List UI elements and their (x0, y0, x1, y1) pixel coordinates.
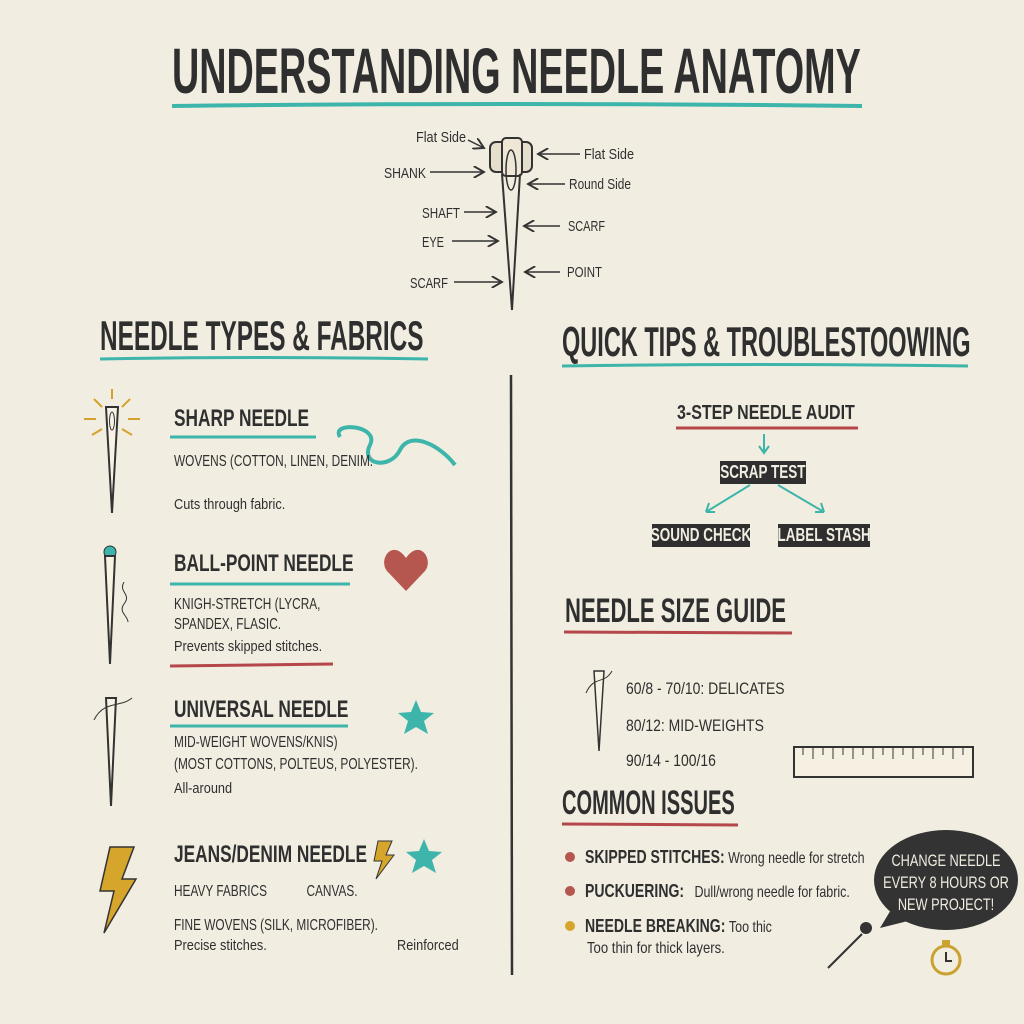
diagram: needle anatomy: POINT (567, 264, 602, 281)
icon: small needle (586, 670, 612, 751)
panel: universal needle (94, 696, 434, 806)
size guide list (586, 670, 974, 778)
panel: ball-point needle: SPANDEX, FLASIC. (174, 616, 281, 633)
diagram: needle anatomy: Flat Side (416, 129, 466, 146)
title: UNDERSTANDING NEEDLE ANATOMY (172, 35, 861, 107)
panel: jeans needle: JEANS/DENIM NEEDLE (174, 841, 367, 868)
diagram: needle anatomy: SCARF (568, 218, 605, 235)
diagram: needle anatomy (384, 129, 634, 310)
panel: jeans needle: Reinforced (397, 937, 459, 954)
callout: change needle bubble: EVERY 8 HOURS OR (883, 873, 1009, 892)
box: sound check: SOUND CHECK (651, 525, 751, 545)
issues list: NEEDLE BREAKING: Too thic (585, 916, 772, 936)
size guide list: 80/12: MID-WEIGHTS (626, 716, 764, 735)
panel: ball-point needle: BALL-POINT NEEDLE (174, 550, 354, 577)
size guide list: 90/14 - 100/16 (626, 751, 716, 770)
icon: lightning (99, 846, 138, 934)
box: scrap test: SCRAP TEST (720, 462, 806, 482)
panel: universal needle: All-around (174, 780, 232, 797)
callout: change needle bubble: CHANGE NEEDLE (891, 851, 1001, 870)
panel: sharp needle: SHARP NEEDLE (174, 405, 309, 432)
panel: ball-point needle (104, 546, 428, 668)
diagram: needle anatomy: Round Side (569, 176, 631, 193)
heading: common issues: COMMON ISSUES (562, 784, 735, 822)
size guide list: 60/8 - 70/10: DELICATES (626, 679, 785, 698)
issues list: SKIPPED STITCHES: Wrong needle for stretch (585, 847, 865, 867)
diagram: needle anatomy: SHAFT (422, 205, 460, 222)
flowchart: 3-step audit (651, 402, 871, 547)
diagram: needle anatomy: Flat Side (584, 146, 634, 163)
panel: sharp needle: Cuts through fabric. (174, 496, 285, 513)
panel: jeans needle: Precise stitches. (174, 937, 267, 954)
icon: ball point needle (104, 546, 128, 664)
heading: quick tips: QUICK TIPS & TROUBLESTOOWING (562, 318, 971, 365)
box: label stash: LABEL STASH (777, 525, 871, 545)
panel: universal needle: (MOST COTTONS, POLTEUS, POLYESTER). (174, 756, 418, 773)
diagram: needle anatomy: SCARF (410, 275, 448, 292)
panel: jeans needle: FINE WOVENS (SILK, MICROFIBER). (174, 917, 378, 934)
panel: universal needle: MID-WEIGHT WOVENS/KNIS) (174, 734, 338, 751)
issues list (565, 847, 865, 957)
diagram: needle anatomy: SHANK (384, 165, 426, 182)
icon: sharp needle (84, 389, 140, 513)
flowchart: 3-step audit: 3-STEP NEEDLE AUDIT (677, 402, 855, 424)
heading: needle types: NEEDLE TYPES & FABRICS (100, 312, 424, 359)
panel: sharp needle (84, 389, 456, 513)
icon: universal needle (94, 697, 132, 806)
diagram: needle anatomy: EYE (422, 234, 444, 251)
icon: ruler (793, 746, 974, 778)
panel: ball-point needle: KNIGH-STRETCH (LYCRA, (174, 596, 320, 613)
panel: jeans needle (99, 839, 459, 954)
panel: ball-point needle: Prevents skipped stitches. (174, 638, 322, 655)
panel: sharp needle: WOVENS (COTTON, LINEN, DENIM. (174, 453, 373, 470)
heading: needle size guide: NEEDLE SIZE GUIDE (565, 592, 786, 630)
callout: change needle bubble (827, 830, 1018, 976)
panel: jeans needle: HEAVY FABRICS CANVAS. (174, 883, 358, 900)
callout: change needle bubble: NEW PROJECT! (898, 895, 994, 914)
issues list: PUCKUERING: Dull/wrong needle for fabric. (585, 881, 850, 901)
panel: universal needle: UNIVERSAL NEEDLE (174, 696, 348, 723)
issues list: Too thin for thick layers. (587, 940, 725, 957)
